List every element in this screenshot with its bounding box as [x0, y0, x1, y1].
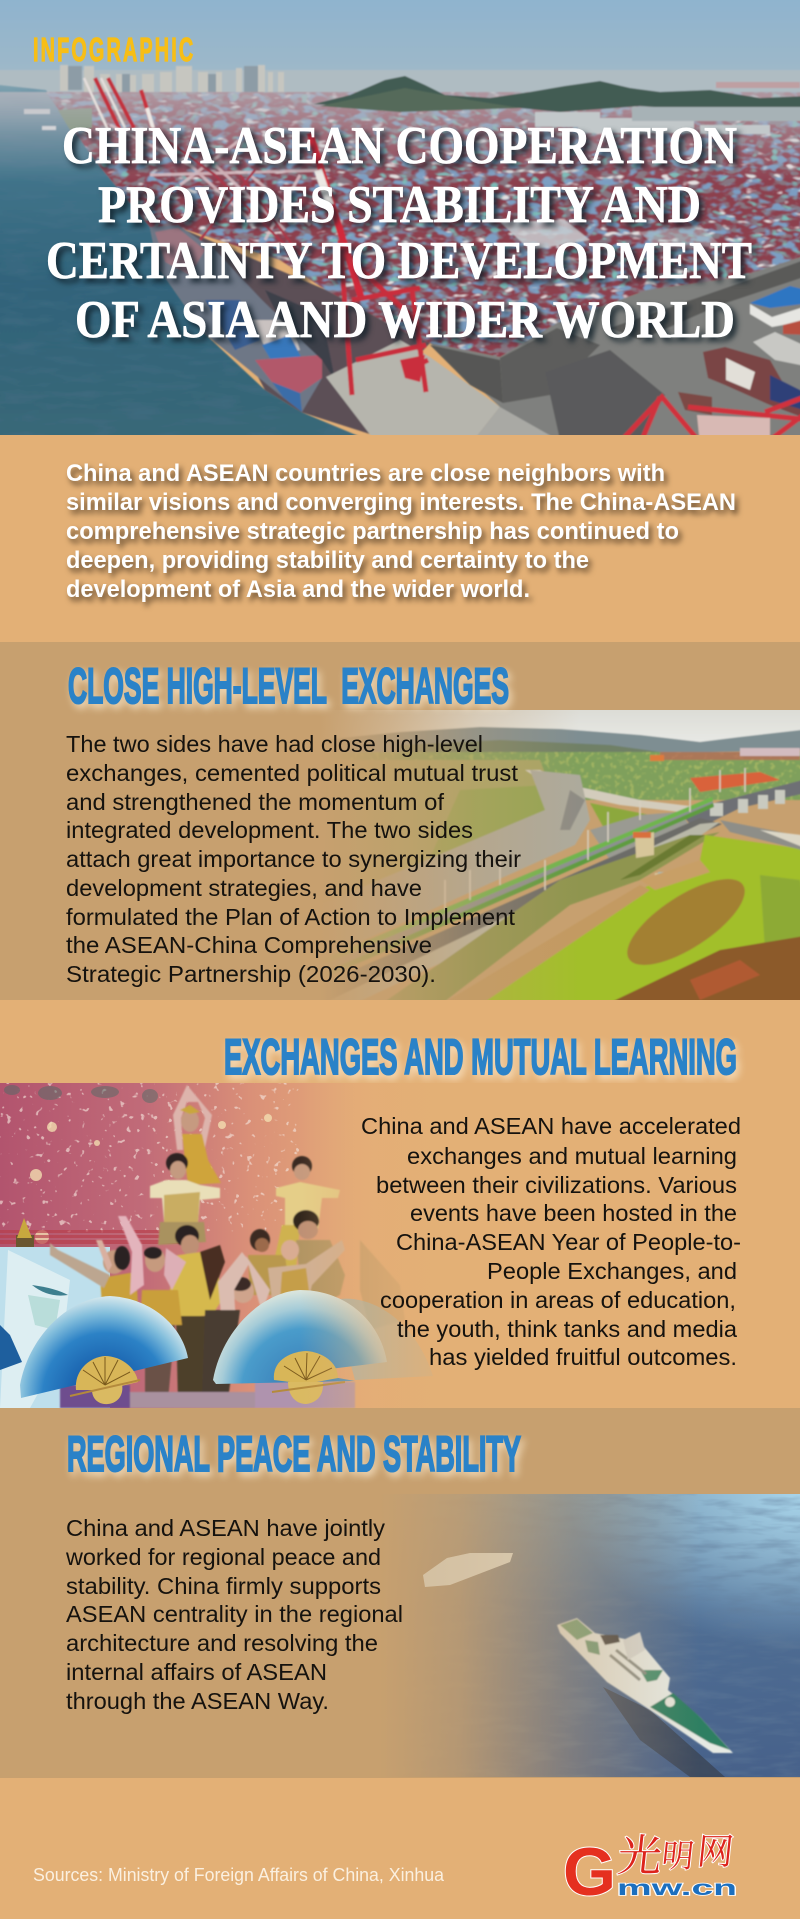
panel: exchanges and mutual learning — [0, 1029, 800, 1408]
icon: right blue fan — [213, 1290, 387, 1404]
text block: exchanges and mutual learning: exchanges and mutual learning — [407, 1143, 737, 1169]
icon: large patrol ship — [557, 1618, 733, 1753]
text block: close high-level exchanges: The two sides have had close high-level — [66, 731, 483, 757]
text block: introduction: China and ASEAN countries are close neighbors with — [66, 460, 665, 487]
text block: close high-level exchanges: exchanges, cemented political mutual trust — [66, 760, 518, 786]
text block: introduction — [66, 460, 736, 603]
title: PROVIDES STABILITY AND — [98, 176, 701, 234]
logo: Guangming Online: mw.cn — [617, 1877, 737, 1900]
text block: introduction: comprehensive strategic partnership has continued to — [66, 518, 679, 545]
text block: regional peace and stability: worked for regional peace and — [65, 1544, 381, 1570]
text block: exchanges and mutual learning: has yielded fruitful outcomes. — [429, 1344, 737, 1370]
heading: INFOGRAPHIC: INFOGRAPHIC — [33, 31, 193, 68]
text block: regional peace and stability: stability. China firmly supports — [66, 1573, 381, 1599]
logo: Guangming Online: 网 — [695, 1823, 736, 1875]
logo: Guangming Online: 光 — [615, 1820, 666, 1884]
text block: introduction: deepen, providing stability and certainty to the — [66, 547, 589, 574]
text block: close high-level exchanges: integrated development. The two sides — [66, 817, 473, 843]
text block: close high-level exchanges: and strengthened the momentum of — [66, 789, 444, 815]
text block: close high-level exchanges — [66, 731, 521, 987]
logo: Guangming Online — [563, 1820, 737, 1910]
icon: left blue fan — [20, 1296, 188, 1404]
text block: regional peace and stability: ASEAN centrality in the regional — [66, 1601, 403, 1627]
text block: exchanges and mutual learning: China-ASEAN Year of People-to- — [396, 1229, 741, 1255]
text block: exchanges and mutual learning: between their civilizations. Various — [376, 1172, 737, 1198]
text block: regional peace and stability: through the ASEAN Way. — [66, 1688, 329, 1714]
text block: close high-level exchanges: attach great importance to synergizing their — [66, 846, 521, 872]
icon: small distant ship — [460, 1553, 513, 1580]
panel: hero photo of container port — [0, 0, 800, 445]
text block: introduction: similar visions and converging interests. The China-ASEAN — [66, 489, 736, 516]
text block: regional peace and stability — [65, 1515, 403, 1714]
dancer group — [50, 1085, 405, 1408]
text block: exchanges and mutual learning — [361, 1113, 741, 1370]
logo: Guangming Online: 明 — [660, 1831, 697, 1877]
text block: regional peace and stability: China and ASEAN have jointly — [66, 1515, 385, 1541]
photo: dancers with blue fans — [0, 1083, 626, 1408]
text block: close high-level exchanges: Strategic Partnership (2026-2030). — [66, 961, 436, 987]
text block: close high-level exchanges: development strategies, and have — [66, 875, 422, 901]
photo: ships at sea — [414, 1494, 800, 1777]
text block: exchanges and mutual learning: People Exchanges, and — [487, 1258, 737, 1284]
source note: Sources: Ministry of Foreign Affairs of China, Xinhua — [33, 1865, 445, 1885]
photo: railway and green fields — [338, 710, 800, 1000]
panel: regional peace and stability — [0, 1408, 800, 1778]
text block: close high-level exchanges: the ASEAN-China Comprehensive — [66, 932, 432, 958]
text block: exchanges and mutual learning: cooperation in areas of education, — [380, 1287, 736, 1313]
text block: close high-level exchanges: formulated the Plan of Action to Implement — [66, 904, 515, 930]
text block: introduction: development of Asia and the wider world. — [66, 576, 530, 603]
logo: Guangming Online: G — [563, 1834, 616, 1910]
text block: exchanges and mutual learning: events have been hosted in the — [410, 1200, 737, 1226]
text block: regional peace and stability: internal affairs of ASEAN — [66, 1659, 327, 1685]
title — [46, 117, 752, 349]
text block: exchanges and mutual learning: China and ASEAN have accelerated — [361, 1113, 741, 1139]
icon: far left fan edge — [0, 1325, 22, 1370]
title: OF ASIA AND WIDER WORLD — [75, 291, 735, 349]
text block: regional peace and stability: architecture and resolving the — [66, 1630, 378, 1656]
icon: faded fan behind — [333, 1299, 433, 1380]
text block: exchanges and mutual learning: the youth, think tanks and media — [397, 1316, 738, 1342]
panel: close high-level exchanges — [0, 642, 800, 1020]
